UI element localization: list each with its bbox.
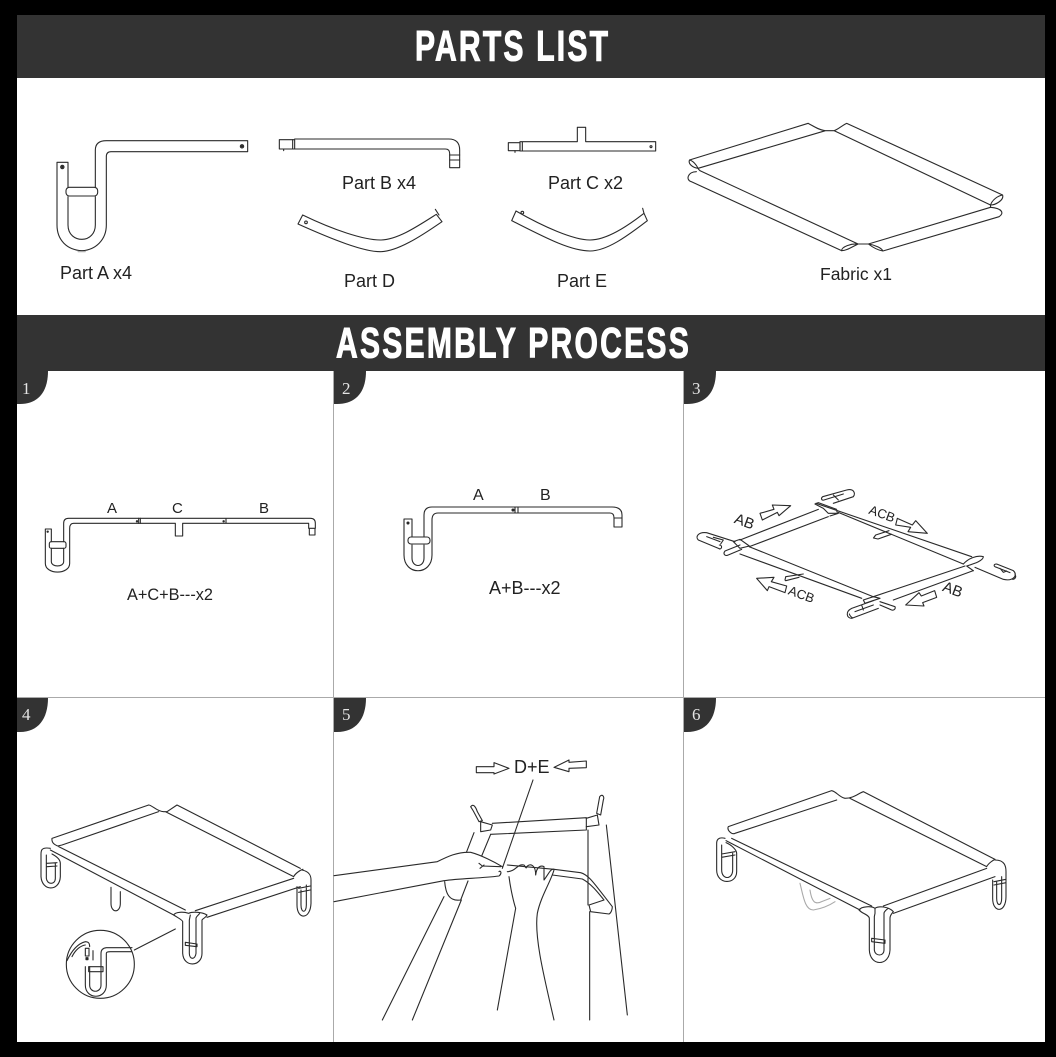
step 1 panel: [17, 371, 315, 604]
step number 6: 6: [692, 705, 700, 724]
step number 1: [17, 371, 48, 404]
step 5 panel: [334, 698, 627, 1020]
detail inset circle: [66, 929, 175, 998]
step number 1: 1: [22, 379, 30, 398]
rail A+B: [404, 507, 622, 571]
letters A B: A: [473, 487, 484, 504]
label D+E with arrows: [476, 757, 586, 777]
step 2 panel: [334, 371, 622, 598]
part B drawing: [279, 139, 460, 168]
step 6 panel: [684, 698, 1006, 962]
step number 3: [684, 371, 716, 404]
assembled bed without brace: [41, 805, 311, 964]
arrow AB upper: [760, 505, 791, 520]
arrows and labels: [732, 502, 965, 606]
step number 5: [334, 698, 366, 732]
part D drawing: [298, 209, 442, 252]
caption step 2: A+B---x2: [489, 578, 561, 598]
part E label: Part E: [557, 271, 607, 291]
step number 4: [17, 698, 48, 732]
part C label: Part C x2: [548, 173, 623, 193]
step number 5: 5: [342, 705, 350, 724]
fabric drawing: [688, 123, 1003, 251]
step number 3: 3: [692, 379, 700, 398]
rail A+C+B: [45, 518, 315, 572]
part A label: Part A x4: [60, 263, 132, 283]
right and bottom corners: [847, 556, 1016, 618]
left and top corners: [697, 490, 854, 555]
arrows and labels: AB: [732, 510, 757, 533]
letters A B: B: [540, 487, 551, 504]
step number 2: 2: [342, 379, 350, 398]
finished bed: [717, 791, 1006, 962]
part D label: Part D: [344, 271, 395, 291]
part A drawing: [57, 141, 248, 252]
letters A C B: B: [259, 500, 269, 517]
caption step 1: A+C+B---x2: [127, 586, 213, 604]
heading: assembly process: [17, 315, 1045, 371]
letters A C B: C: [172, 500, 183, 517]
hands fitting the brace: [334, 780, 627, 1020]
step number 2: [334, 371, 366, 404]
fabric label: Fabric x1: [820, 264, 892, 284]
letters A B: [473, 487, 551, 504]
step number 6: [684, 698, 716, 732]
heading: parts list: PARTS LIST: [415, 21, 608, 70]
step 3 panel: [684, 371, 1016, 618]
part E drawing: [512, 208, 647, 251]
arrows and labels: ACB: [867, 502, 897, 525]
part B label: Part B x4: [342, 173, 416, 193]
letters A C B: [107, 500, 269, 517]
heading: assembly process: ASSEMBLY PROCESS: [336, 318, 689, 367]
panel: parts list: [57, 123, 1003, 291]
label D+E with arrows: D+E: [514, 757, 550, 777]
step 4 panel: [17, 698, 311, 998]
frame of rails: [697, 490, 1016, 618]
part C drawing: [508, 127, 656, 152]
heading: parts list: [17, 15, 1045, 78]
arrows and labels: AB: [940, 578, 965, 601]
step number 4: 4: [22, 705, 31, 724]
letters A C B: A: [107, 500, 117, 517]
arrows and labels: ACB: [786, 583, 817, 606]
